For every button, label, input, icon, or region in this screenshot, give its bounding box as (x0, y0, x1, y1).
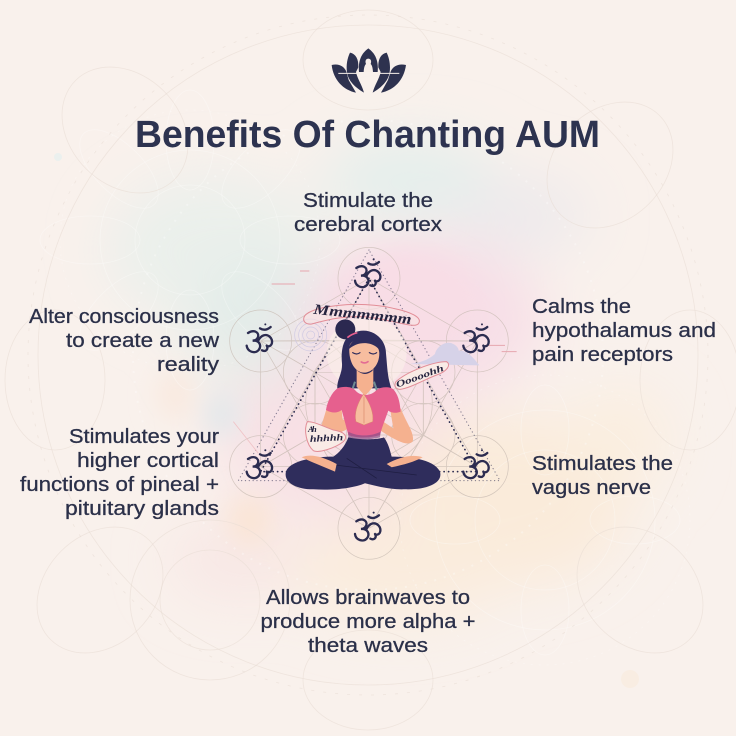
benefit: brainwaves: produce more alpha + (260, 611, 476, 633)
speech: Mmmmmmm (304, 302, 419, 328)
benefit: higher cortical functions: pituitary glands (65, 498, 219, 520)
benefit: alter consciousness: reality (157, 354, 219, 376)
woman meditating (286, 319, 440, 490)
benefit: brainwaves: Allows brainwaves to (266, 587, 470, 609)
cloud (410, 343, 479, 365)
hair bun (335, 319, 355, 339)
benefit: vagus nerve: Stimulates the (532, 453, 673, 475)
benefit: calms the hypothalamus (532, 296, 716, 366)
feet (302, 456, 337, 472)
benefit: vagus nerve (532, 453, 673, 499)
speech: Oooohh: Ooooohh (395, 364, 445, 390)
hair fringe (348, 335, 383, 355)
benefit: alter consciousness: Alter consciousness (29, 306, 219, 328)
radiating circles (295, 319, 327, 351)
speech: Ahhhh (306, 422, 346, 451)
benefit: higher cortical functions: functions of pineal + (20, 474, 219, 496)
central illustration (230, 247, 517, 559)
benefit: vagus nerve: vagus nerve (532, 477, 651, 499)
neck (357, 367, 373, 396)
hair back (337, 331, 391, 388)
watercolor wash (54, 138, 670, 688)
arms (321, 408, 363, 435)
glow behind head (327, 317, 407, 390)
speech: Ahhhh: hhhhh (310, 433, 343, 445)
benefit: brainwaves: theta waves (308, 635, 428, 657)
benefit: alter consciousness: to create a new (66, 330, 220, 352)
praying hands (355, 394, 373, 425)
benefit: higher cortical functions: Stimulates your (69, 426, 219, 448)
benefit: cerebral cortex (294, 190, 442, 236)
shirt (326, 387, 401, 437)
benefit: cerebral cortex: Stimulate the (303, 190, 433, 212)
shoulder straps (352, 382, 377, 392)
dotted triangles (238, 250, 500, 481)
closed eyes and mouth (353, 353, 377, 354)
benefit: alter consciousness (29, 306, 220, 376)
title: Benefits Of Chanting AUM (135, 114, 600, 156)
sacred geometry (230, 247, 508, 559)
speech: Mmmmmmm: Mmmmmmm (312, 302, 412, 328)
speech: Oooohh (395, 362, 449, 390)
legs (286, 437, 440, 490)
benefit: brainwaves (260, 587, 476, 657)
om symbols (355, 258, 380, 287)
benefit: calms the hypothalamus: hypothalamus and (532, 320, 716, 342)
speech: Ahhhh: Ah (307, 424, 317, 434)
benefit: calms the hypothalamus: Calms the (532, 296, 631, 318)
benefit: calms the hypothalamus: pain receptors (532, 344, 673, 366)
benefit: cerebral cortex: cerebral cortex (294, 214, 442, 236)
lotus logo icon (332, 48, 406, 93)
benefit: higher cortical functions (20, 426, 219, 520)
benefit: higher cortical functions: higher cortical (77, 450, 219, 472)
face (349, 340, 379, 373)
pink accent lines (272, 271, 517, 352)
